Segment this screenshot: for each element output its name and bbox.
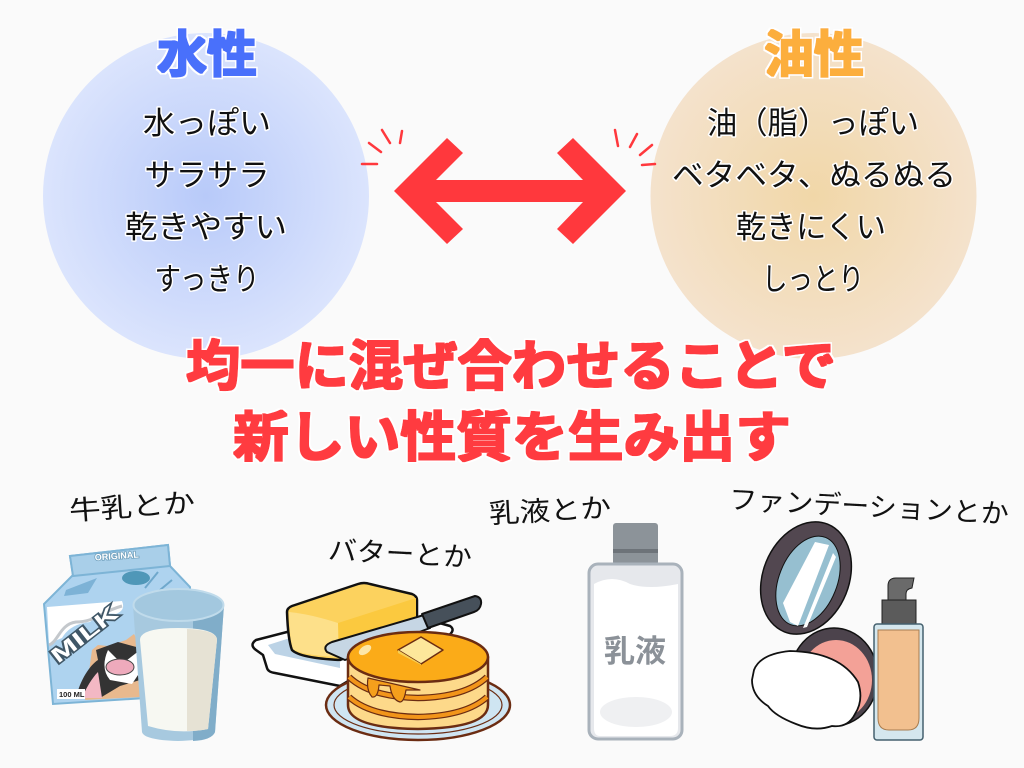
label: lotion: 乳液とか	[488, 493, 612, 529]
panel: water-based circle	[43, 27, 369, 359]
text: water-based traits: すっきり	[154, 262, 260, 297]
title: main message: 新しい性質を生み出す	[233, 408, 791, 468]
icon: lotion bottle	[589, 523, 682, 739]
text: oil-based traits: 油（脂）っぽい	[707, 106, 919, 141]
icon: right emphasis ticks	[615, 130, 655, 165]
title: main message: 均一に混ぜ合わせることで	[186, 337, 836, 397]
panel: oil-based circle	[650, 27, 976, 359]
title: main message	[186, 337, 836, 468]
label: foundation: ファンデーションとか	[728, 485, 1010, 529]
text: water-based traits: 乾きやすい	[125, 210, 287, 245]
text: oil-based traits: ベタベタ、ぬるぬる	[672, 158, 956, 193]
icon: left emphasis ticks	[362, 130, 402, 164]
label: milk: 牛乳とか	[68, 488, 196, 526]
label: butter: バターとか	[327, 535, 473, 573]
text: oil-based traits: 乾きにくい	[736, 210, 886, 245]
heading: oil-based: 油性	[764, 27, 864, 83]
icon: milk carton and glass	[44, 545, 224, 741]
text: water-based traits: 水っぽい	[143, 106, 271, 141]
icon: butter dish and pancakes	[252, 583, 510, 740]
heading: water-based: 水性	[157, 27, 257, 83]
icon: milk carton and glass: ORIGINAL	[94, 549, 140, 563]
text: water-based traits	[125, 106, 287, 297]
text: water-based traits: サラサラ	[144, 158, 270, 193]
arrow: double-headed red arrow	[394, 138, 626, 244]
icon: milk carton and glass: 100 ML	[59, 690, 85, 699]
text: oil-based traits	[672, 106, 956, 297]
icon: milk carton and glass: MILK	[47, 602, 123, 668]
text: oil-based traits: しっとり	[762, 262, 864, 297]
icon: lotion bottle: 乳液	[604, 634, 666, 669]
icon: compact and foundation bottle	[744, 508, 923, 740]
